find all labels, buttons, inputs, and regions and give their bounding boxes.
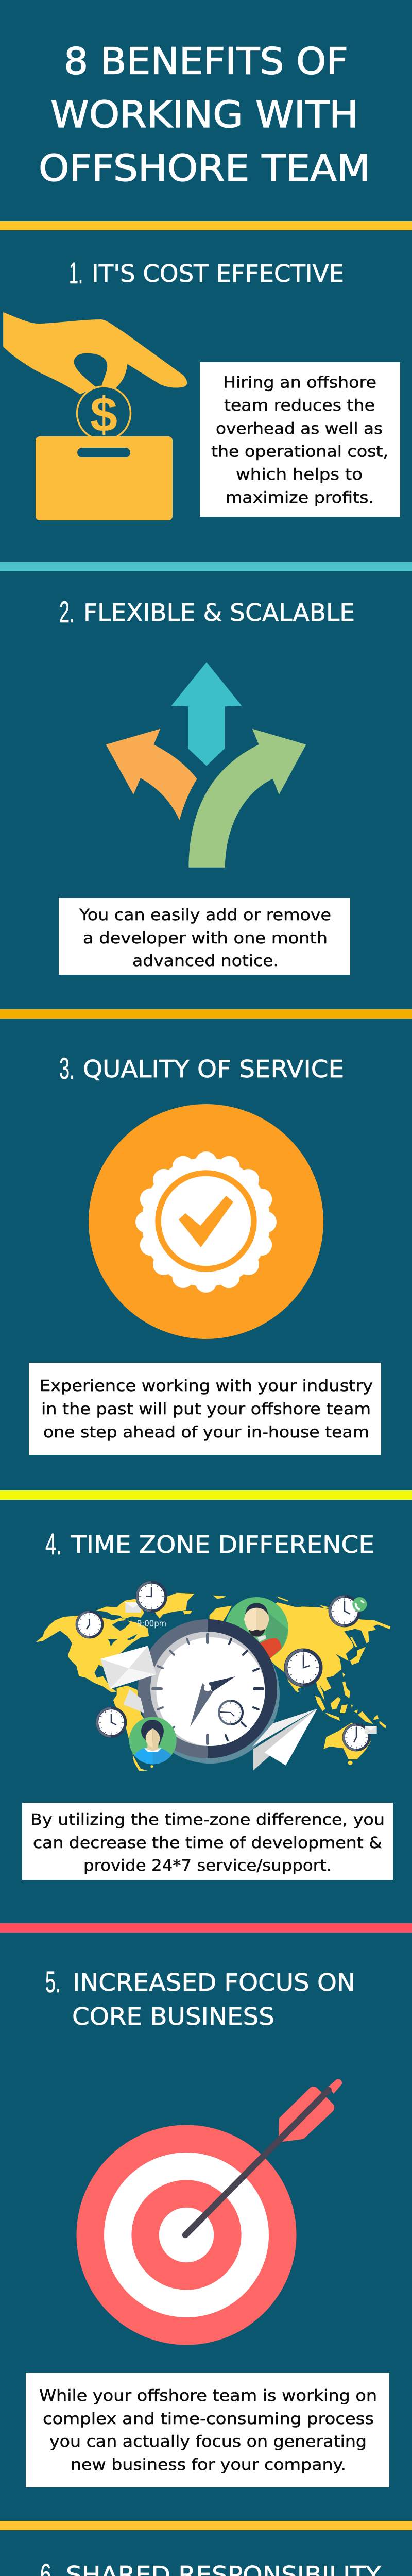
text box 3 xyxy=(29,1363,381,1455)
text box 4: provide 24*7 service/support. xyxy=(83,1857,332,1875)
avatar: woman xyxy=(129,1717,177,1765)
heading 2: FLEXIBLE & SCALABLE xyxy=(83,599,355,626)
envelopes xyxy=(100,1602,156,1713)
text box 2 xyxy=(59,898,350,975)
text box 2: advanced notice. xyxy=(132,952,279,970)
panel: shared responsibility xyxy=(35,2558,384,2576)
heading 5: INCREASED FOCUS ON xyxy=(73,1969,355,1996)
text box 5 xyxy=(26,2373,389,2487)
icon: three direction arrows xyxy=(106,662,306,868)
text box 1: overhead as well as xyxy=(216,420,383,438)
text box 2: a developer with one month xyxy=(83,929,328,947)
title: OFFSHORE TEAM xyxy=(39,147,370,190)
icon: phone badge and mail xyxy=(352,1597,377,1734)
heading 3: 3. xyxy=(59,1052,75,1086)
text box 1 xyxy=(200,362,400,517)
clocks around the map xyxy=(76,1581,370,1751)
heading 1: 1. xyxy=(69,257,83,290)
text box 5: you can actually focus on generating xyxy=(49,2433,367,2451)
text box 1: Hiring an offshore xyxy=(223,374,376,392)
text box 1: maximize profits. xyxy=(226,489,374,507)
heading 5 xyxy=(45,1965,355,2030)
panel: quality of service xyxy=(29,1052,381,1455)
heading 5: 5. xyxy=(45,1965,61,1999)
title: WORKING WITH xyxy=(50,93,358,136)
text box 5: new business for your company. xyxy=(71,2456,346,2474)
icon: hand dropping coin into box: $ xyxy=(90,387,117,442)
icon: quality badge with check mark xyxy=(89,1104,323,1339)
small clock inside face xyxy=(218,1700,244,1725)
heading 5: CORE BUSINESS xyxy=(72,2003,274,2030)
paper plane xyxy=(252,1709,317,1771)
text box 1: the operational cost, xyxy=(211,443,388,461)
heading 3: QUALITY OF SERVICE xyxy=(83,1055,344,1083)
heading 1: IT'S COST EFFECTIVE xyxy=(92,260,344,287)
text box 5: While your offshore team is working on xyxy=(39,2387,377,2405)
world map: americas xyxy=(36,1593,194,1771)
panel: flexible and scalable xyxy=(59,596,355,975)
heading 2: 2. xyxy=(59,596,75,629)
illustration: world map with clocks xyxy=(36,1581,390,1771)
text box 4 xyxy=(22,1803,393,1880)
text box 3: one step ahead of your in-house team xyxy=(43,1423,369,1442)
text box 3: in the past will put your offshore team xyxy=(41,1400,371,1418)
avatar: man xyxy=(225,1597,288,1660)
large clock xyxy=(138,1619,280,1764)
text box 1: which helps to xyxy=(236,466,363,484)
text box 1: team reduces the xyxy=(224,397,375,415)
world map: eurasia and australia xyxy=(210,1596,390,1765)
panel: increased focus xyxy=(26,1965,389,2487)
icon: target with arrow xyxy=(76,2079,342,2345)
title xyxy=(39,40,370,190)
icon: hand dropping coin into box xyxy=(3,312,187,520)
text box 5: complex and time-consuming process xyxy=(43,2410,374,2428)
panel: time zone difference xyxy=(22,1528,393,1880)
text box 2: You can easily add or remove xyxy=(79,906,331,924)
text box 4: can decrease the time of development & xyxy=(33,1834,382,1852)
time label: 9:00pm xyxy=(137,1619,166,1629)
panel: cost effective xyxy=(3,257,400,520)
text box 3: Experience working with your industry xyxy=(40,1377,373,1395)
heading 4: TIME ZONE DIFFERENCE xyxy=(71,1531,374,1558)
text box 4: By utilizing the time-zone difference, you xyxy=(30,1811,385,1829)
heading 4: 4. xyxy=(45,1528,62,1561)
title: 8 BENEFITS OF xyxy=(64,40,348,82)
